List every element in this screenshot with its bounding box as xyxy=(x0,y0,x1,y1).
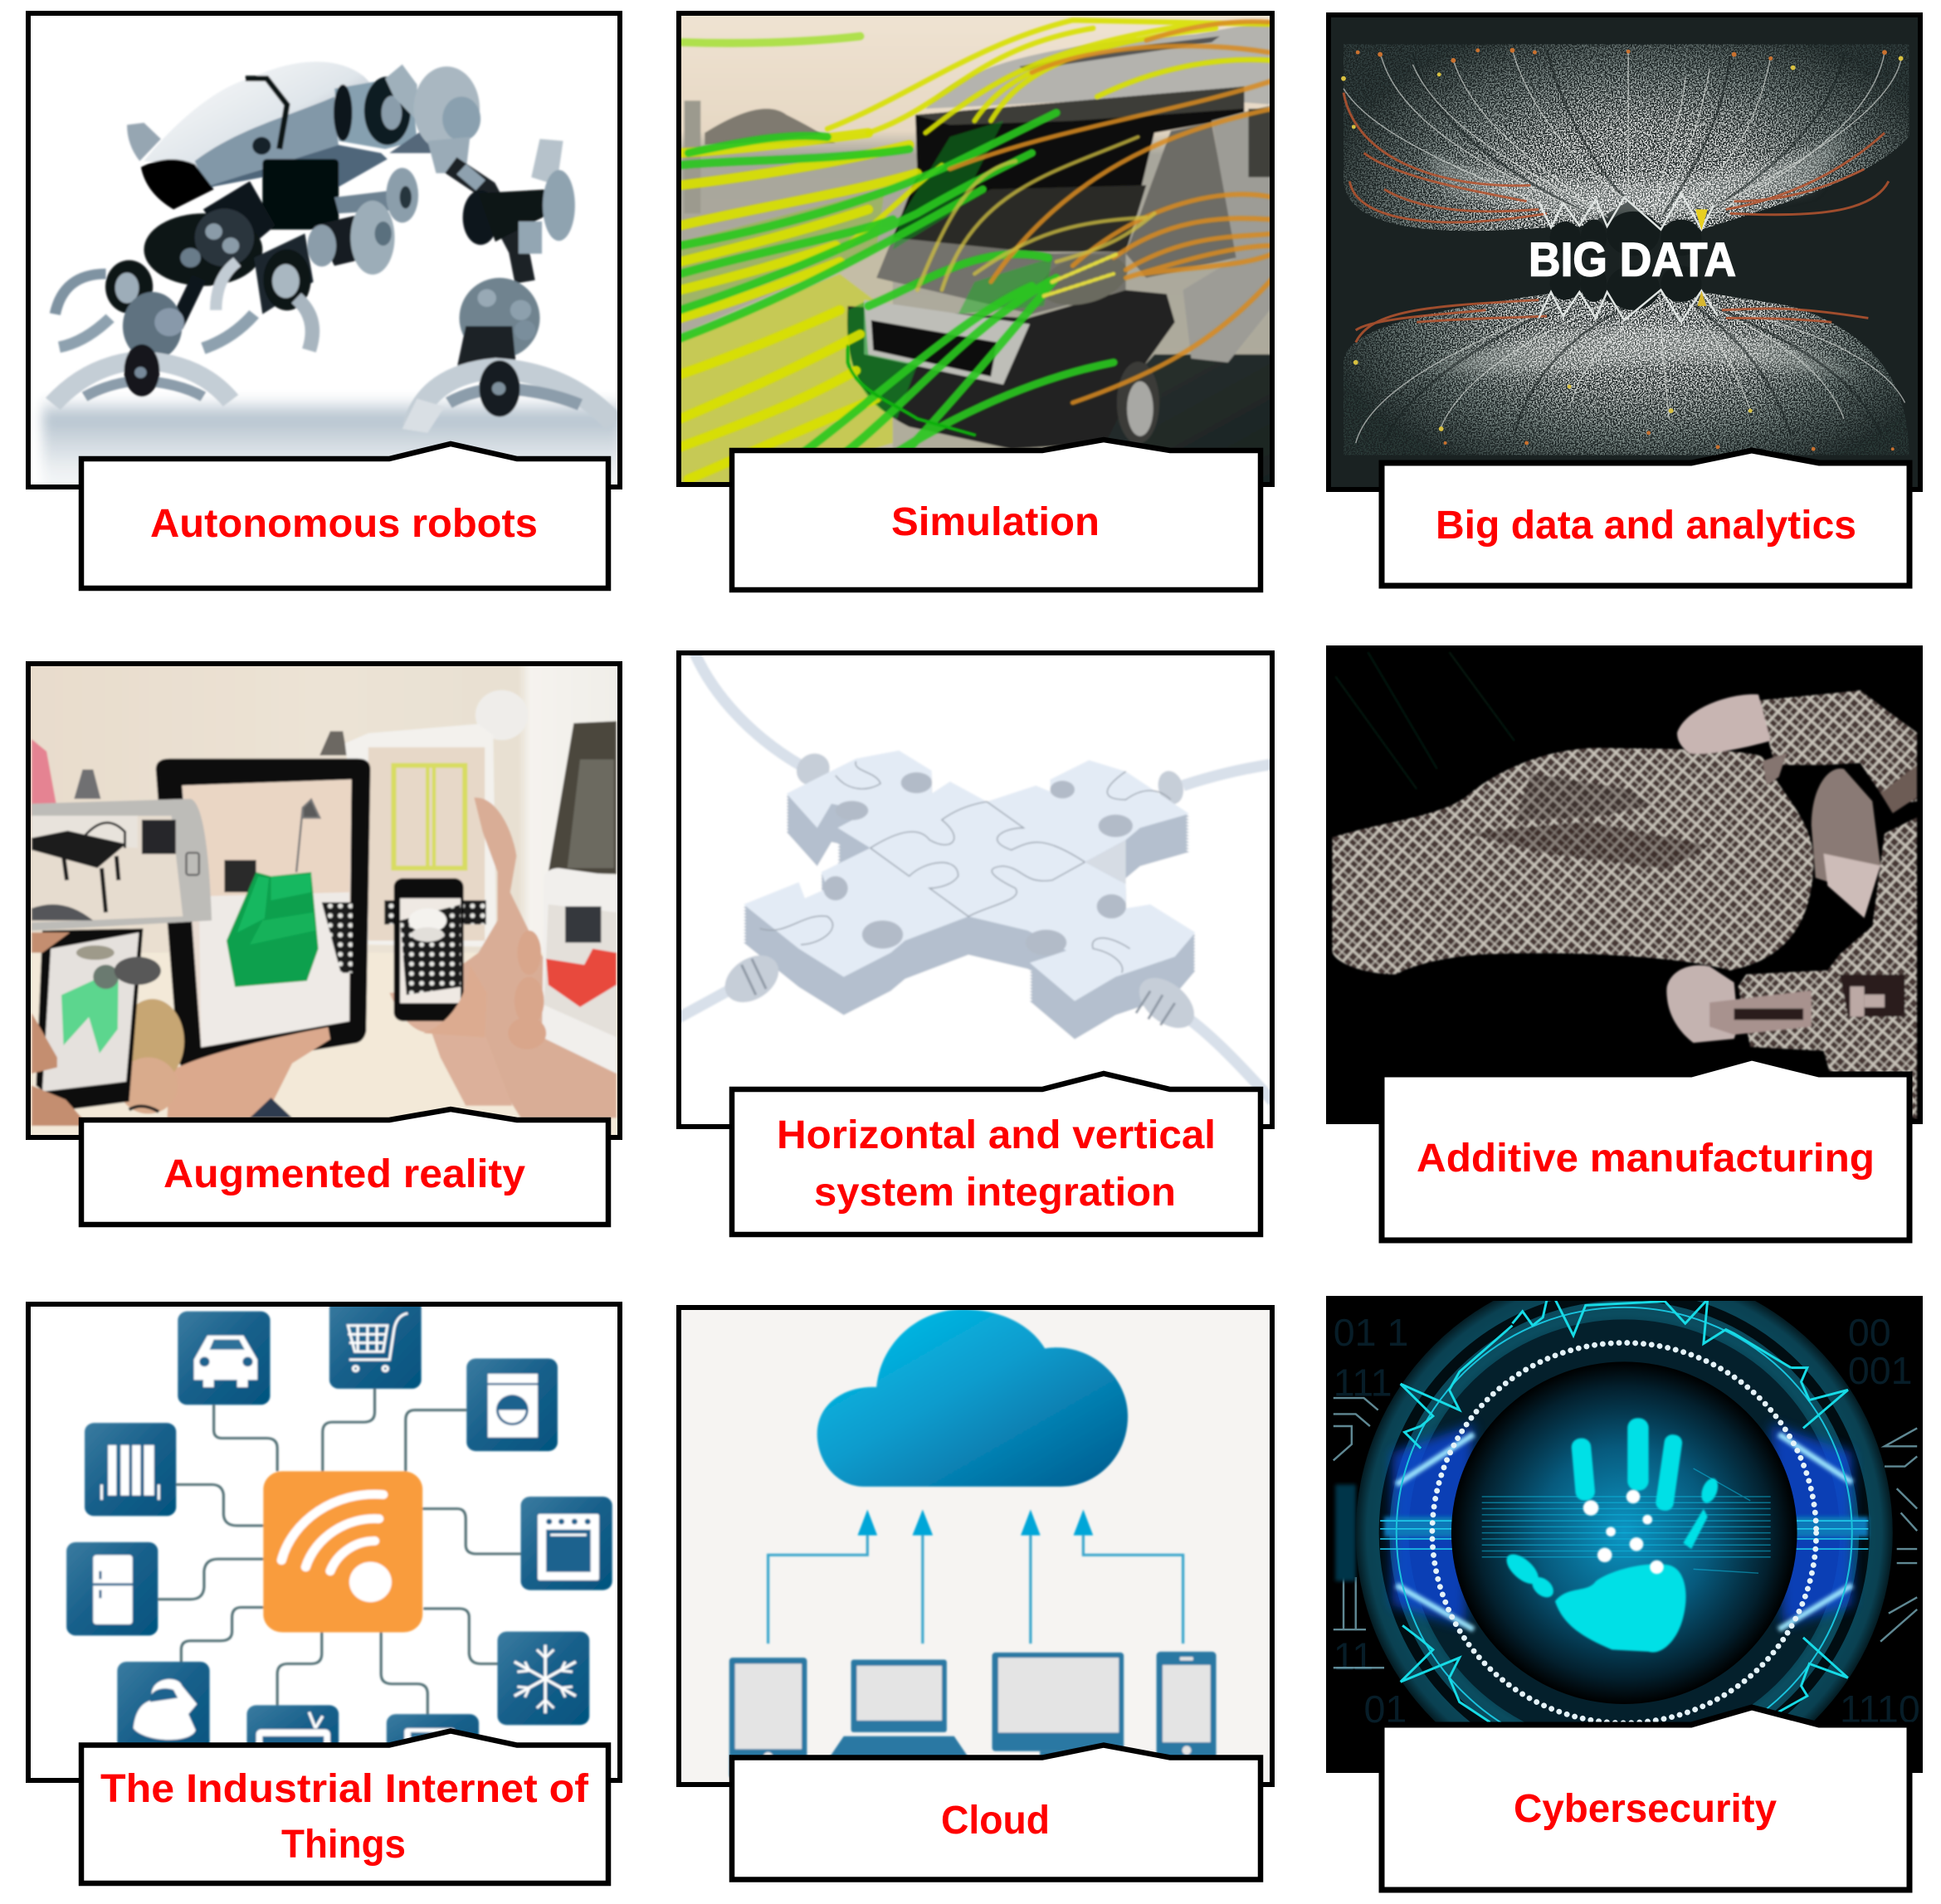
image: glowing handprint scanner: 1110 xyxy=(1840,1687,1920,1731)
panel: cybersecurity xyxy=(1326,1267,1923,1890)
label box xyxy=(732,440,1261,590)
label text xyxy=(100,1767,589,1867)
image: connected puzzle pieces xyxy=(676,650,1277,1130)
label text: Autonomous robots xyxy=(150,502,538,546)
label box xyxy=(81,1109,608,1225)
panel: simulation xyxy=(676,11,1277,590)
label box xyxy=(732,1074,1261,1234)
image: IoT hub and icons xyxy=(65,1307,614,1742)
label text: system integration xyxy=(814,1171,1176,1215)
image border xyxy=(1329,15,1920,489)
panel: big data and analytics xyxy=(1324,10,1925,586)
image: AR devices xyxy=(26,659,627,1142)
image border xyxy=(679,1307,1272,1785)
image: glowing handprint scanner: 001 xyxy=(1848,1349,1913,1392)
image: big data particles xyxy=(1324,10,1925,494)
image border xyxy=(679,653,1272,1127)
image: glowing handprint scanner: 01 xyxy=(1364,1687,1407,1731)
label text: Cybersecurity xyxy=(1514,1787,1777,1831)
image: glowing handprint scanner: 111 xyxy=(1334,1361,1392,1405)
label box xyxy=(1382,450,1909,586)
icon: cloud xyxy=(817,1309,1128,1487)
image background xyxy=(1326,1296,1923,1773)
label box xyxy=(81,1731,608,1883)
image border xyxy=(28,664,620,1137)
image: van airflow xyxy=(676,11,1277,490)
panel: horizontal and vertical system integration xyxy=(676,650,1277,1234)
label text: Cloud xyxy=(941,1799,1050,1843)
label text: Big data and analytics xyxy=(1436,504,1856,548)
label box xyxy=(81,444,608,588)
panel: augmented reality xyxy=(26,659,627,1225)
image background xyxy=(1326,645,1923,1124)
image border xyxy=(28,1304,620,1780)
label text: Simulation xyxy=(891,500,1100,544)
panel: additive manufacturing xyxy=(1326,645,1923,1240)
image title: BIG DATA: BIG DATA xyxy=(1529,234,1736,286)
label text: Things xyxy=(281,1823,406,1867)
panel: cloud xyxy=(676,1305,1275,1880)
label box xyxy=(732,1746,1261,1880)
label text: Additive manufacturing xyxy=(1417,1137,1875,1181)
panel: autonomous robots xyxy=(26,11,622,588)
image: glowing handprint scanner: 00 xyxy=(1848,1311,1891,1354)
image: robot xyxy=(35,61,617,485)
label box xyxy=(1382,1058,1909,1240)
image border xyxy=(679,13,1272,485)
label text xyxy=(777,1113,1216,1215)
image: glowing handprint scanner: 01 1 xyxy=(1334,1311,1408,1354)
label text: Horizontal and vertical xyxy=(777,1113,1216,1157)
label text: The Industrial Internet of xyxy=(100,1767,589,1811)
image: glowing handprint scanner: 11 xyxy=(1334,1635,1373,1678)
image: 3D printed lattice hand and car xyxy=(1332,652,1917,1119)
label box xyxy=(1382,1707,1909,1890)
panel: the industrial internet of things xyxy=(26,1295,622,1883)
image: glowing handprint scanner xyxy=(1334,1267,1920,1799)
image: cloud and devices xyxy=(676,1305,1275,1788)
label text: Augmented reality xyxy=(163,1152,525,1196)
image border xyxy=(28,13,620,487)
